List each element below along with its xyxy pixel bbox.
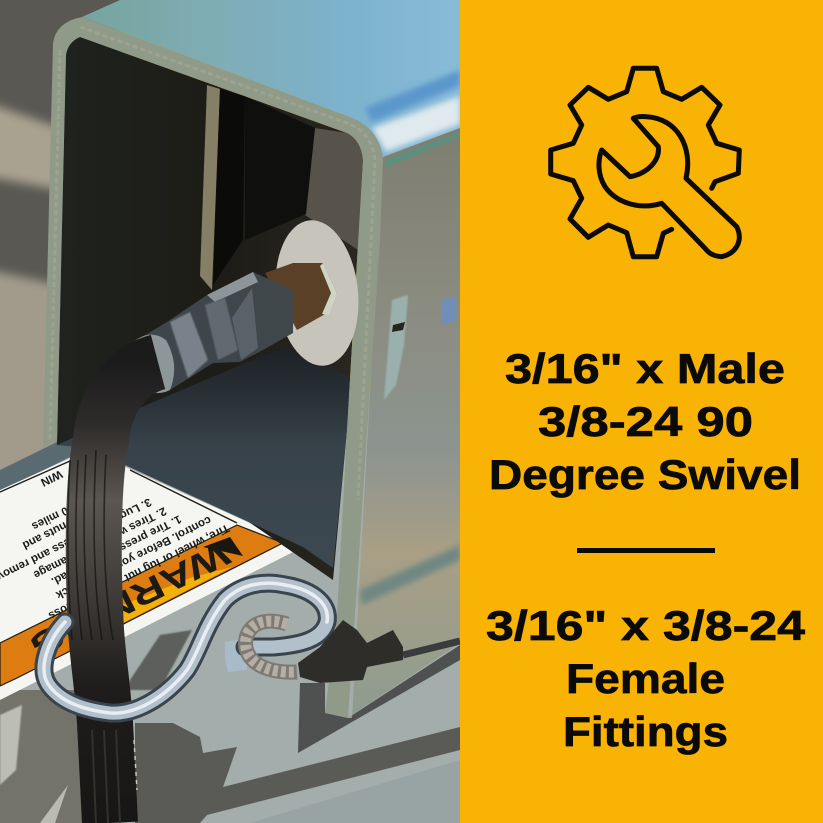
cable and clamp: [298, 620, 460, 683]
frame front rim: [43, 17, 383, 718]
text block: male fitting spec: 3/8-24 90: [538, 398, 753, 445]
text block: female fitting spec: [486, 602, 806, 755]
beam surface below the frame: [0, 380, 460, 823]
label fine print: 1. Tire pressure and tread.: [49, 512, 183, 587]
photo: trailer frame with brake hose and cable: [0, 0, 460, 823]
text block: female fitting spec: Female: [566, 655, 725, 702]
label fine print: 2. Tires wheels for damage: [31, 504, 168, 581]
text block: female fitting spec: 3/16" x 3/8-24: [486, 602, 806, 649]
frame top face: [82, 0, 460, 157]
blurred ground behind the frame: [0, 0, 120, 500]
divider: [577, 548, 715, 553]
rubber hose: [68, 362, 158, 823]
text block: male fitting spec: Degree Swivel: [489, 451, 801, 498]
icon: gear with wrench: [551, 68, 739, 257]
warning label: [0, 450, 303, 700]
warning triangle icon: [203, 537, 243, 556]
washer plate: [276, 220, 358, 366]
label fine print: Tire, wheel or lug nut can cause loss: [46, 521, 231, 622]
label fine print: 25 and 50 miles: [30, 483, 111, 532]
gear outline: [551, 68, 739, 257]
label heading: WARNING: [23, 534, 235, 665]
frame side face: [348, 128, 460, 718]
label fine print: tighten lug nuts and: [20, 491, 124, 551]
text block: male fitting spec: 3/16" x Male: [505, 345, 785, 392]
shackle pin: [225, 638, 247, 672]
label fine print: WIN: [39, 467, 64, 488]
frame interior: [57, 37, 363, 580]
rim highlights: [50, 27, 375, 500]
text block: male fitting spec: [489, 345, 801, 498]
text block: female fitting spec: Fittings: [563, 708, 728, 755]
label fine print: [0, 467, 231, 622]
cable loop: [246, 621, 297, 672]
S hook: [44, 583, 327, 713]
hose fitting: [132, 263, 337, 393]
wrench outline: [599, 117, 739, 257]
label fine print: control. Before you must check: [53, 513, 213, 601]
